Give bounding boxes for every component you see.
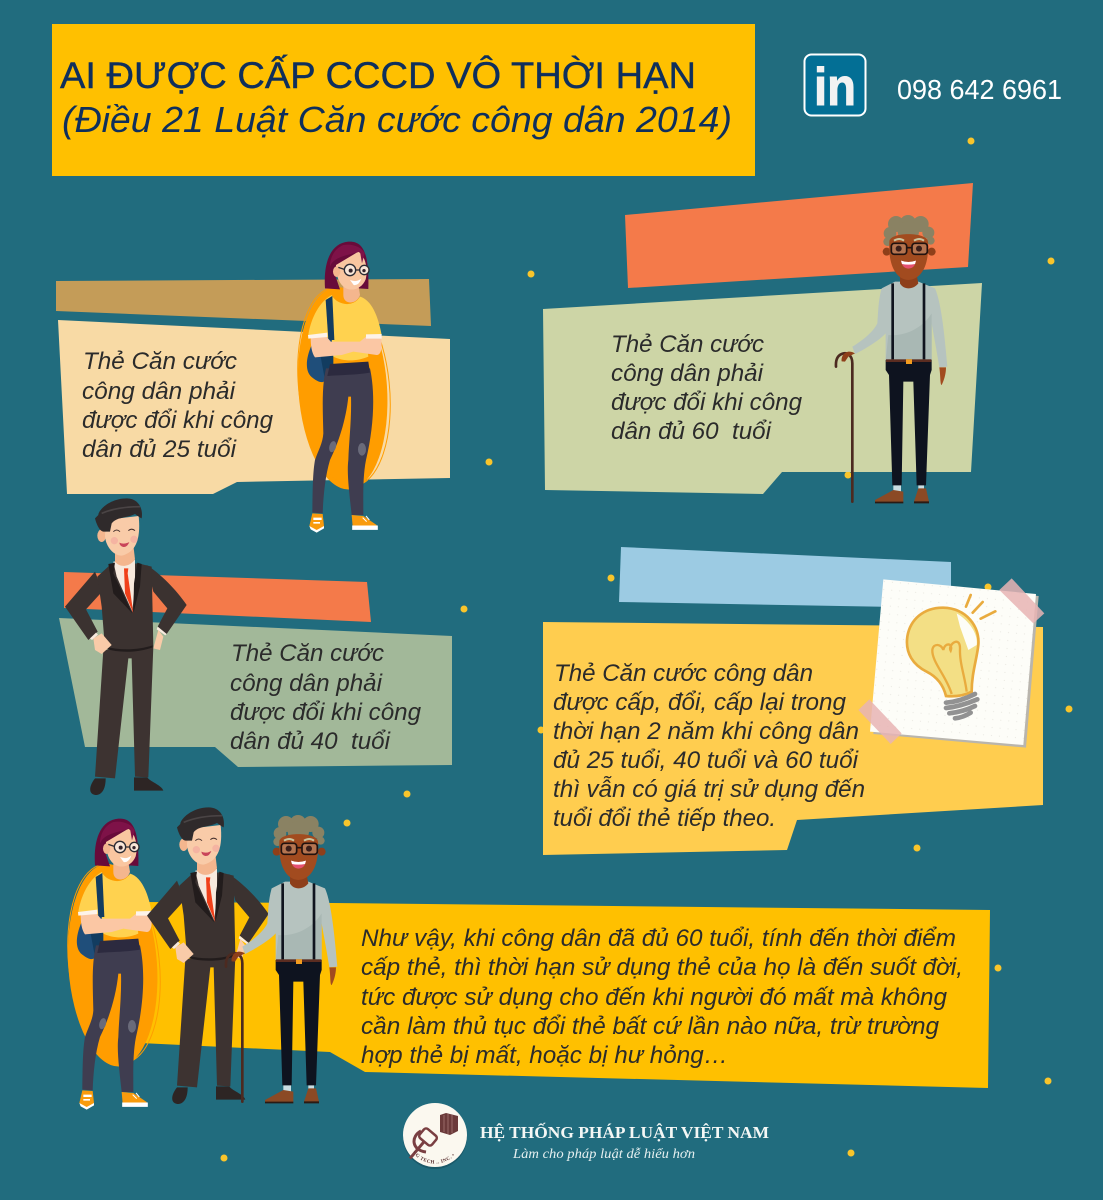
panel: age 40: dân đủ 40 tuổi bbox=[230, 728, 391, 755]
footer: organisation name: HỆ THỐNG PHÁP LUẬT VIỆT NAM bbox=[480, 1122, 769, 1142]
icon: man in suit bbox=[65, 498, 187, 795]
logo: • G TECH .. INC. • bbox=[414, 1151, 454, 1164]
title bbox=[52, 24, 755, 176]
icon: light bulb note bbox=[858, 578, 1044, 748]
icon: woman with backpack bbox=[288, 242, 400, 533]
panel: age 60 bbox=[543, 183, 982, 494]
panel: age 25: Thẻ Căn cước bbox=[83, 348, 237, 375]
panel: conclusion: cấp thẻ, thì thời hạn sử dụng thẻ của họ là đến suốt đời, bbox=[361, 954, 963, 981]
panel: age 40: Thẻ Căn cước bbox=[231, 640, 384, 667]
title: (Điều 21 Luật Căn cước công dân 2014) bbox=[62, 99, 732, 140]
title: AI ĐƯỢC CẤP CCCD VÔ THỜI HẠN bbox=[60, 55, 696, 96]
panel: age 25: được đổi khi công bbox=[82, 407, 273, 434]
panel: age 40: được đổi khi công bbox=[230, 699, 421, 726]
panel: age 25: dân đủ 25 tuổi bbox=[82, 436, 237, 463]
footer: slogan: Làm cho pháp luật dễ hiểu hơn bbox=[512, 1147, 695, 1162]
panel: age 60: dân đủ 60 tuổi bbox=[611, 418, 772, 445]
panel: conclusion: tức được sử dụng cho đến khi người đó mất mà không bbox=[361, 984, 947, 1011]
logo bbox=[403, 1103, 467, 1169]
panel: conclusion bbox=[140, 902, 990, 1088]
panel: age 60: được đổi khi công bbox=[611, 389, 802, 416]
panel: validity note: Thẻ Căn cước công dân bbox=[554, 660, 813, 687]
panel: age 60: Thẻ Căn cước bbox=[611, 331, 764, 358]
panel: age 60: công dân phải bbox=[611, 360, 764, 387]
panel: conclusion: cần làm thủ tục đổi thẻ bất cứ lần nào nữa, trừ trường bbox=[361, 1013, 939, 1040]
icon: older man with cane bbox=[836, 215, 947, 503]
panel: validity note: được cấp, đổi, cấp lại trong bbox=[553, 689, 846, 716]
panel: validity note: thì vẫn có giá trị sử dụng đến bbox=[553, 775, 865, 803]
panel: conclusion: hợp thẻ bị mất, hoặc bị hư hỏng… bbox=[361, 1042, 728, 1069]
panel: age 25 bbox=[56, 279, 450, 494]
icon: group of three people bbox=[58, 807, 337, 1110]
panel: age 25: công dân phải bbox=[82, 378, 236, 405]
panel: validity note: đủ 25 tuổi, 40 tuổi và 60 tuổi bbox=[553, 747, 859, 774]
phone number: 098 642 6961 bbox=[897, 74, 1062, 105]
panel: conclusion: Như vậy, khi công dân đã đủ 60 tuổi, tính đến thời điểm bbox=[361, 925, 956, 952]
panel: age 40: công dân phải bbox=[230, 670, 383, 697]
panel: validity note bbox=[543, 547, 1043, 855]
panel: age 40 bbox=[59, 572, 452, 767]
panel: validity note: tuổi đổi thẻ tiếp theo. bbox=[553, 805, 776, 832]
icon: linkedin: in bbox=[814, 58, 856, 117]
panel: validity note: thời hạn 2 năm khi công dân bbox=[553, 718, 859, 745]
